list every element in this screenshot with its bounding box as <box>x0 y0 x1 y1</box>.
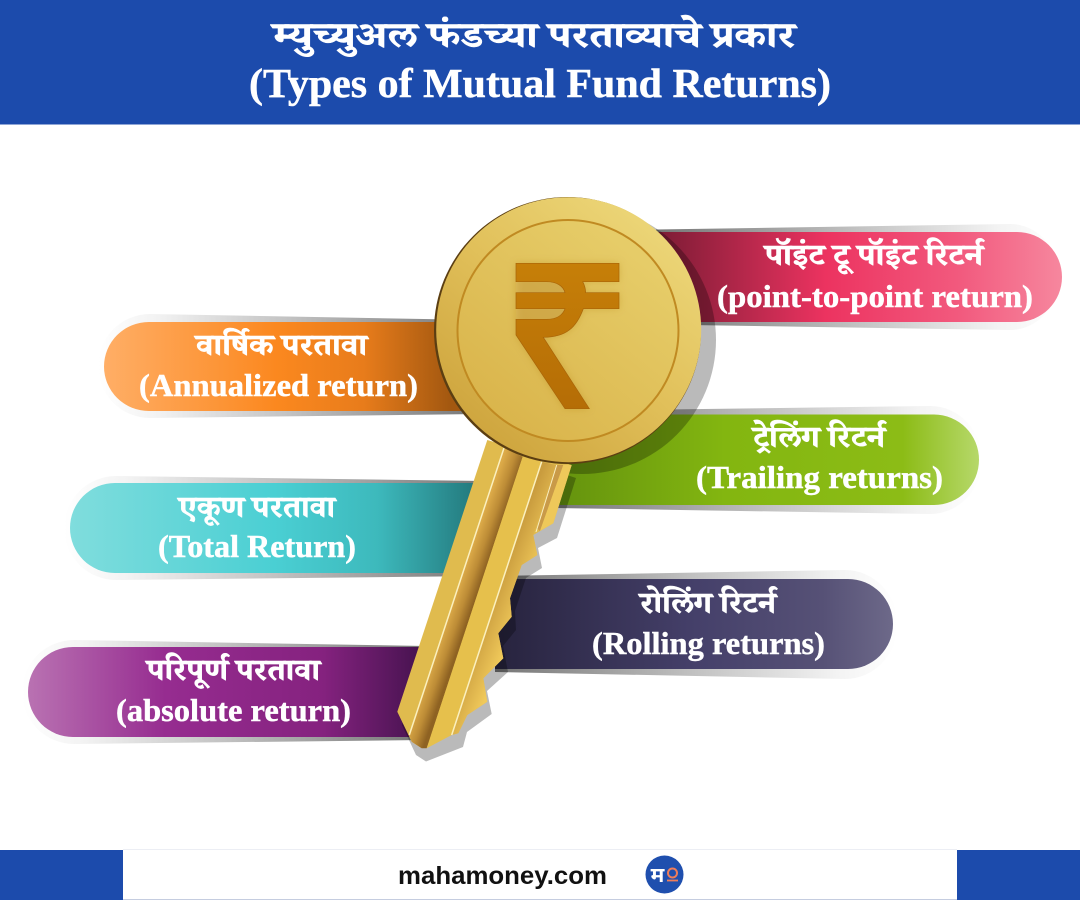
label: point-to-point Marathi: पॉइंट टू पॉइंट रिटर्न <box>763 237 986 275</box>
icon: mahamoney logo: म <box>651 864 665 887</box>
pill: rolling returns <box>495 570 897 679</box>
icon: key <box>397 440 572 748</box>
icon: rupee symbol <box>516 263 619 409</box>
label: annualized Marathi: वार्षिक परतावा <box>194 328 369 362</box>
icon: rupee coin <box>434 197 701 464</box>
footer: website: mahamoney.com <box>398 862 607 890</box>
label: total return Marathi: एकूण परतावा <box>177 491 337 527</box>
icon: mahamoney logo <box>646 856 684 894</box>
label: absolute English: (absolute return) <box>116 692 351 728</box>
header banner <box>0 0 1080 124</box>
label: trailing English: (Trailing returns) <box>696 459 943 495</box>
title: English: (Types of Mutual Fund Returns) <box>249 60 831 106</box>
footer: right blue bar <box>957 850 1080 900</box>
pill: annualized return <box>98 314 480 418</box>
label: rolling English: (Rolling returns) <box>592 625 825 661</box>
pill: point-to-point return <box>656 224 1062 330</box>
label: rolling Marathi: रोलिंग रिटर्न <box>638 585 779 620</box>
label: total return English: (Total Return) <box>158 528 356 564</box>
label: annualized English: (Annualized return) <box>139 367 418 403</box>
key shadow <box>402 450 576 762</box>
pill: absolute return <box>22 640 425 744</box>
coin shadow <box>448 206 716 474</box>
label: trailing Marathi: ट्रेलिंग रिटर्न <box>751 419 888 454</box>
footer: left blue bar <box>0 850 123 900</box>
pill: trailing returns <box>555 406 982 514</box>
title: Marathi: म्युच्युअल फंडच्या परताव्याचे प्रकार <box>269 14 798 59</box>
label: point-to-point English: (point-to-point return) <box>717 278 1033 314</box>
label: absolute Marathi: परिपूर्ण परतावा <box>145 653 322 690</box>
pill: total return <box>64 476 485 580</box>
